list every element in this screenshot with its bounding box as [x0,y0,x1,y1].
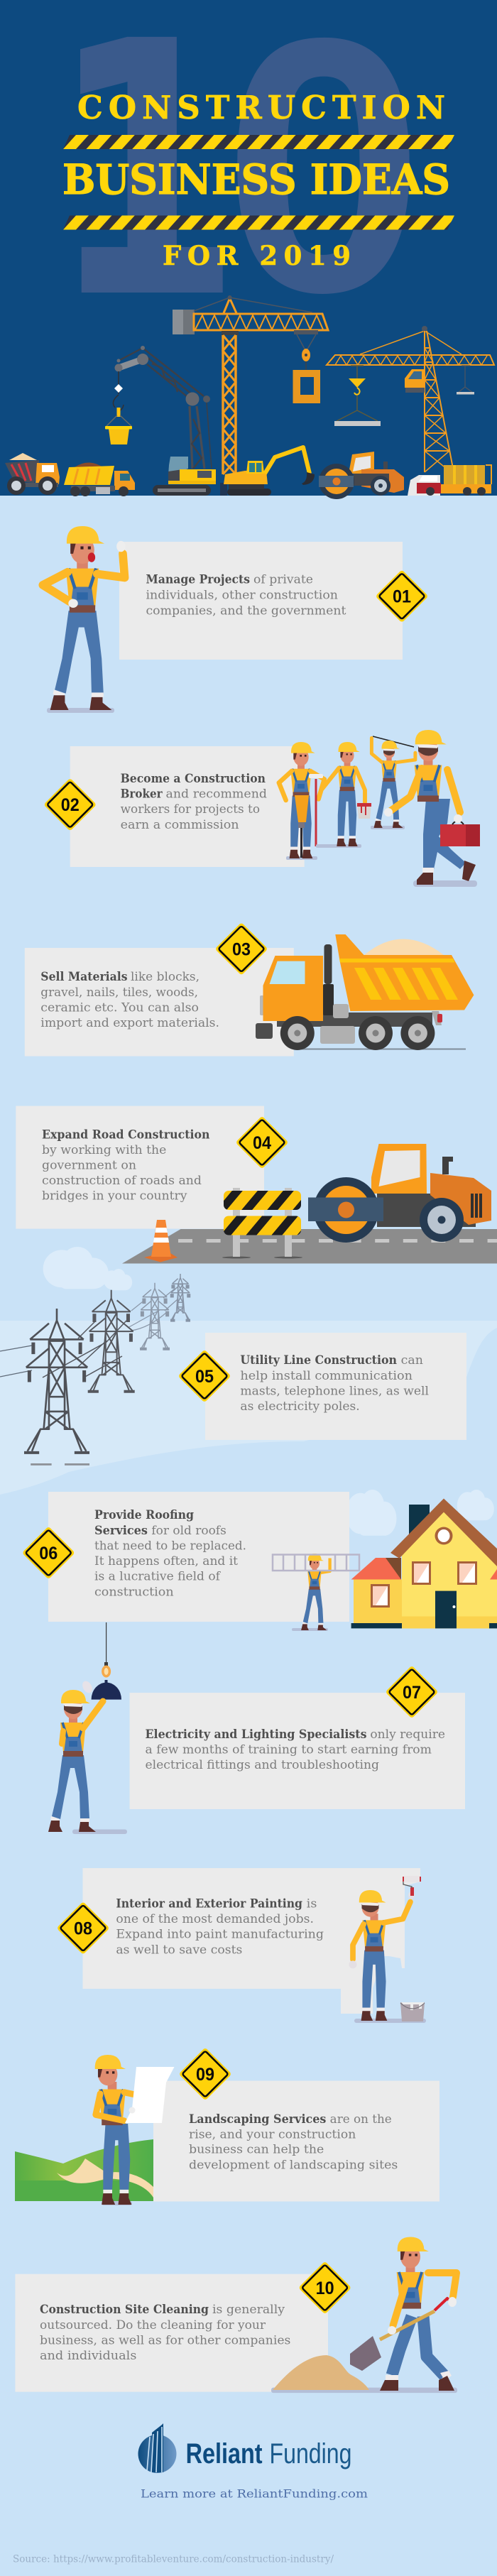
text panel [130,1693,465,1809]
text panel [48,1492,349,1622]
section 04: road construction [16,1106,497,1264]
description text [40,2303,290,2362]
source line: Source: https://www.profitableventure.com/construction-industry/ [13,2553,334,2565]
description text [145,1728,445,1772]
icon: worker fixing lamp [48,1679,127,1834]
description text: construction [94,1585,174,1599]
description text: Sell Materials [40,970,127,983]
description text: by working with the [42,1143,166,1157]
number badge 04: 04 [253,1133,271,1153]
description text: and recommend [166,787,267,801]
icon: orange dump truck [256,934,474,1050]
icon: flatbed truck [408,465,491,496]
number badge 08 [57,1901,109,1955]
icon: distant pylon [140,1283,170,1349]
icon: worker painting from behind [371,736,415,829]
icon: near pylon [24,1309,89,1464]
description text: masts, telephone lines, as well [240,1384,429,1397]
description text: and individuals [40,2349,136,2362]
section 08: painting [57,1868,426,2023]
header background [0,0,497,496]
number badge 05 [178,1350,231,1402]
description text: companies, and the government [146,604,346,617]
text panel [25,948,294,1057]
icon: worker carrying ladder [273,1554,359,1631]
call to action: Learn more at ReliantFunding.com [141,2487,368,2501]
number badge 03 [215,922,268,976]
section 07: electricity and lighting [48,1622,465,1834]
description text: is a lucrative field of [94,1570,222,1583]
description text: It happens often, and it [94,1554,238,1568]
sky band [0,1321,497,1495]
description text: Utility Line Construction [240,1353,397,1367]
title line: for 2019: FOR 2019 [163,240,351,271]
number badge 04 [236,1116,288,1169]
description text: individuals, other construction [146,588,338,602]
logo wordmark: Reliant [186,2438,263,2469]
section 10: site cleaning [15,2237,457,2393]
icon: traffic cone [144,1220,178,1262]
number badge 10: 10 [316,2278,334,2298]
section 01: manage projects [43,526,428,713]
icon: road roller small [319,452,404,499]
description text: Electricity and Lighting Specialists [145,1728,366,1741]
number badge 06: 06 [39,1544,58,1563]
description text: earn a commission [121,818,239,831]
description text: for old roofs [151,1524,226,1537]
description text: Services [94,1524,148,1537]
icon: worker reading blueprint [95,2055,175,2205]
logo mark [138,2423,176,2473]
section 06: roofing services [22,1490,497,1631]
description text: business, as well as for other companies [40,2333,290,2347]
section 03: sell materials [25,922,474,1057]
icon: shouting worker [43,526,126,713]
description text: Construction Site Cleaning [40,2303,209,2316]
description text: gravel, nails, tiles, woods, [40,986,198,999]
number badge 05: 05 [195,1367,214,1387]
icon: yellow dump truck [64,463,135,496]
description text [40,970,219,1030]
hazard stripe bottom [63,216,454,230]
description text: ceramic etc. You can also [40,1000,199,1014]
description text: Landscaping Services [189,2112,326,2126]
header banner [0,0,497,499]
icon: worker with paint roller [349,1876,426,2023]
section 09: landscaping services [15,2048,439,2205]
icon: road roller [308,1144,491,1243]
section 02: construction broker [43,730,480,887]
number badge 07: 07 [403,1683,421,1703]
description text: import and export materials. [40,1016,219,1030]
description text: a few months of training to start earning from [145,1742,432,1757]
description text: construction of roads and [42,1174,202,1187]
description text [94,1508,246,1599]
section 05: utility line construction [0,1247,497,1495]
number badge 01: 01 [393,587,411,607]
number badge 10 [298,2261,351,2314]
title line: construction: CONSTRUCTION [77,89,445,126]
description text: outsourced. Do the cleaning for your [40,2318,266,2332]
hazard stripe top [63,135,454,149]
description text: business can help the [189,2143,324,2156]
icon: clouds [43,1247,132,1290]
description text: Expand into paint manufacturing [116,1928,324,1941]
description text: help install communication [240,1369,413,1382]
icon: excavator [220,447,315,496]
description text: Provide Roofing [94,1508,194,1522]
icon: crawler crane [105,346,216,496]
text panel [70,746,305,867]
number badge 09: 09 [196,2065,214,2085]
description text: can [401,1353,423,1367]
title line: business ideas: BUSINESS IDEAS [62,155,450,204]
text panel [119,542,403,660]
icon: clouds behind house [346,1490,494,1536]
logo: Reliant Funding [138,2423,352,2473]
icon: middle pylon [88,1290,135,1392]
description text: one of the most demanded jobs. [116,1912,314,1926]
number badge 07 [386,1666,438,1718]
description text [121,772,267,831]
icon: far pylon [170,1274,190,1321]
icon: right tower crane [327,326,494,472]
description text: rise, and your construction [189,2127,356,2141]
number badge 03: 03 [232,939,251,959]
description text: Interior and Exterior Painting [116,1896,302,1910]
icon: hanging lamp [92,1622,121,1700]
description text: workers for projects to [121,802,260,816]
description text: of private [253,573,313,586]
description text [116,1896,324,1956]
number badge 01 [376,569,428,623]
road [122,1229,497,1264]
icon: striped road barrier [222,1188,302,1258]
description text: bridges in your country [42,1189,187,1203]
description text: as well to save costs [116,1943,242,1956]
description text: Manage Projects [146,573,250,586]
description text [189,2112,398,2171]
number badge 02 [43,778,97,831]
description text: government on [42,1158,136,1172]
description text [146,573,346,617]
logo wordmark second word: Funding [270,2438,352,2469]
number badge 06 [22,1527,75,1579]
big background number 10 [49,0,425,376]
icon: central tower crane [173,295,328,474]
text panel with painted wall [82,1868,420,2014]
description text: as electricity poles. [240,1399,360,1413]
number badge 08: 08 [74,1919,92,1938]
description text: that need to be replaced. [94,1539,246,1552]
text panel [205,1333,466,1440]
description text: Broker [121,787,163,801]
text panel [153,2080,439,2201]
description text: electrical fittings and troubleshooting [145,1758,379,1772]
number badge 02: 02 [61,795,80,815]
icon: tipper with sand [5,453,60,495]
description text: is generally [212,2303,285,2316]
icon: green hills [15,2139,153,2201]
description text: only require [370,1728,445,1741]
icon: worker with jackhammer [279,742,324,860]
icon: yellow house [351,1498,497,1629]
icon: walking worker with toolbox [384,730,480,887]
description text: are on the [330,2112,392,2126]
description text: Become a Construction [121,772,266,785]
number badge 09 [179,2048,231,2100]
description text: development of landscaping sites [189,2159,398,2171]
description text: Expand Road Construction [42,1128,210,1142]
text panel [16,1106,264,1229]
icon: power lines [0,1289,178,1377]
description text [42,1128,210,1203]
text panel [15,2274,328,2392]
icon: worker with paint bucket [316,742,371,848]
description text [240,1353,429,1413]
icon: worker shovelling sand [271,2237,457,2393]
description text: like blocks, [131,970,200,983]
description text: is [307,1896,317,1910]
